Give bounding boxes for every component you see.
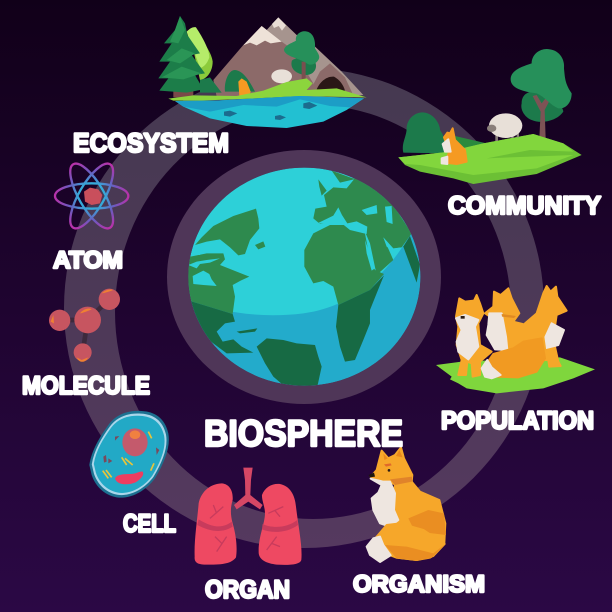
fox right [525,286,567,367]
grass base [398,134,582,184]
tree on mountain [284,31,319,80]
grass [168,78,367,101]
fish [224,102,317,120]
endoplasmic reticulum [115,471,143,484]
haunch [408,510,446,535]
fox left [456,295,492,377]
outer ring [64,68,544,548]
label: population: POPULATION [441,407,594,435]
nucleus [84,188,102,205]
back mountain [267,17,363,97]
land: Britain [318,179,327,196]
trachea [234,468,263,509]
ocean [188,168,420,386]
population illustration [436,286,595,393]
cytoplasm [94,416,165,493]
atom [55,158,128,234]
lungs [195,468,302,565]
tail tip [367,537,391,562]
cave [310,63,354,97]
cell wall [89,411,169,498]
light bush top [187,27,209,68]
fox middle [485,288,547,362]
nose [369,473,375,477]
small fox [238,78,251,96]
tail [373,523,445,560]
title: biosphere: BIOSPHERE [204,413,403,454]
sheep [271,69,292,83]
land: Greenland and Iceland [195,209,265,255]
eye [388,469,390,472]
organelles [103,432,154,478]
big tail [487,338,545,377]
inland seas [317,205,402,271]
bush [403,112,446,153]
cave mouth [317,77,345,91]
nucleolus [130,430,140,439]
label: organism: ORGANISM [353,571,485,598]
brow [384,463,392,467]
body [383,482,445,560]
tail tip [482,360,501,378]
grass [436,357,595,393]
land: India [403,236,420,283]
water [175,96,364,128]
lung veins [210,505,283,552]
lung shading [197,519,298,532]
chest [371,479,398,527]
earth [180,168,430,390]
left lung [195,483,237,565]
label: atom: ATOM [53,247,123,274]
orbits [55,158,128,234]
molecule [49,289,120,362]
land: Eurasia [313,171,412,275]
front snow [243,26,282,45]
back snow [272,17,286,31]
label: molecule: MOLECULE [22,372,150,400]
fox [442,128,467,164]
sheep [487,113,522,141]
tree [511,49,572,138]
nucleus [122,428,148,456]
land: North America [187,253,249,314]
label: community: COMMUNITY [448,192,601,220]
ecosystem illustration [158,16,367,128]
cell membrane [92,413,167,495]
land: Africa [304,225,384,305]
land: South America [257,338,322,387]
label: cell: CELL [123,510,176,538]
ocean shade [191,233,420,386]
right lung [259,484,302,565]
globe ring [167,150,441,404]
tail shade [385,544,445,561]
collar shade [390,477,412,485]
cell [89,411,169,498]
grass top [398,134,573,175]
front mountain [213,26,313,97]
Hudson Bay [189,253,220,286]
water shade [175,96,364,112]
highlights [51,289,113,362]
bonds [60,299,109,352]
organism fox [367,447,446,562]
land: Central America [187,300,257,353]
land: southern Africa [336,275,384,362]
community illustration [398,49,582,184]
mitochondria [103,436,159,463]
dark bushes [200,70,255,93]
globe [167,150,441,404]
label: organ: ORGAN [205,576,290,604]
dark hill [455,136,487,153]
label: ecosystem: ECOSYSTEM [73,128,229,158]
atoms [49,289,120,361]
ears [383,450,403,460]
light bush [193,33,213,80]
head [371,447,412,485]
pine tree [158,16,205,97]
